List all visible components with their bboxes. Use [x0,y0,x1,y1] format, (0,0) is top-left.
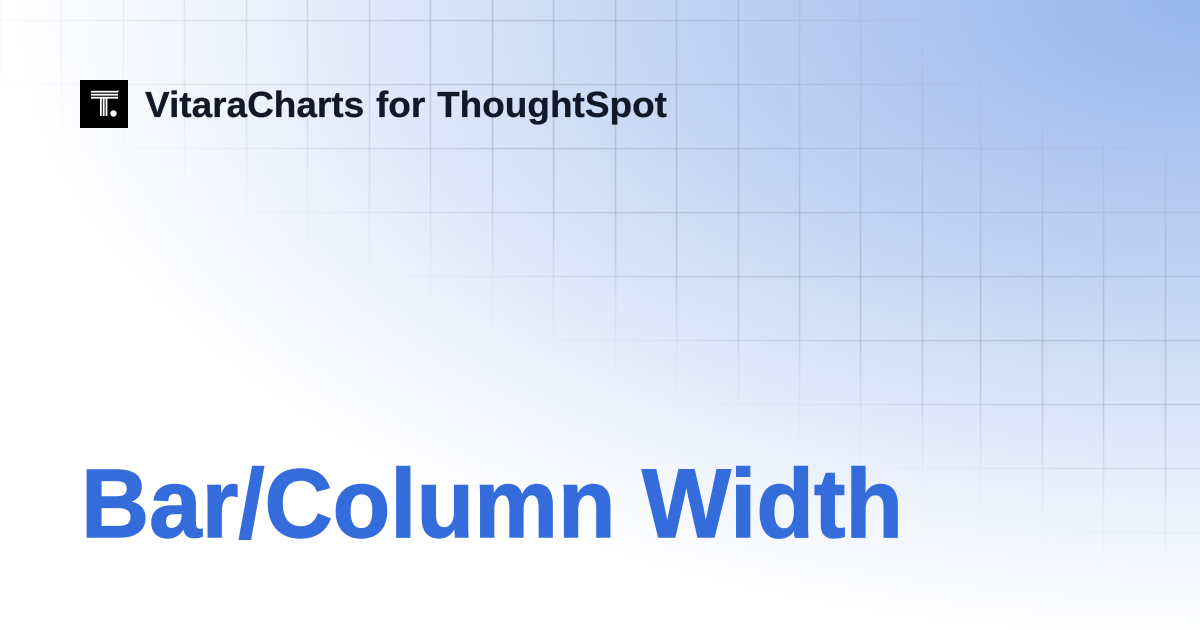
title: Bar/Column Width [81,449,903,558]
brand heading: VitaraCharts for ThoughtSpot [145,84,667,125]
icon: ThoughtSpot logo [80,80,128,128]
